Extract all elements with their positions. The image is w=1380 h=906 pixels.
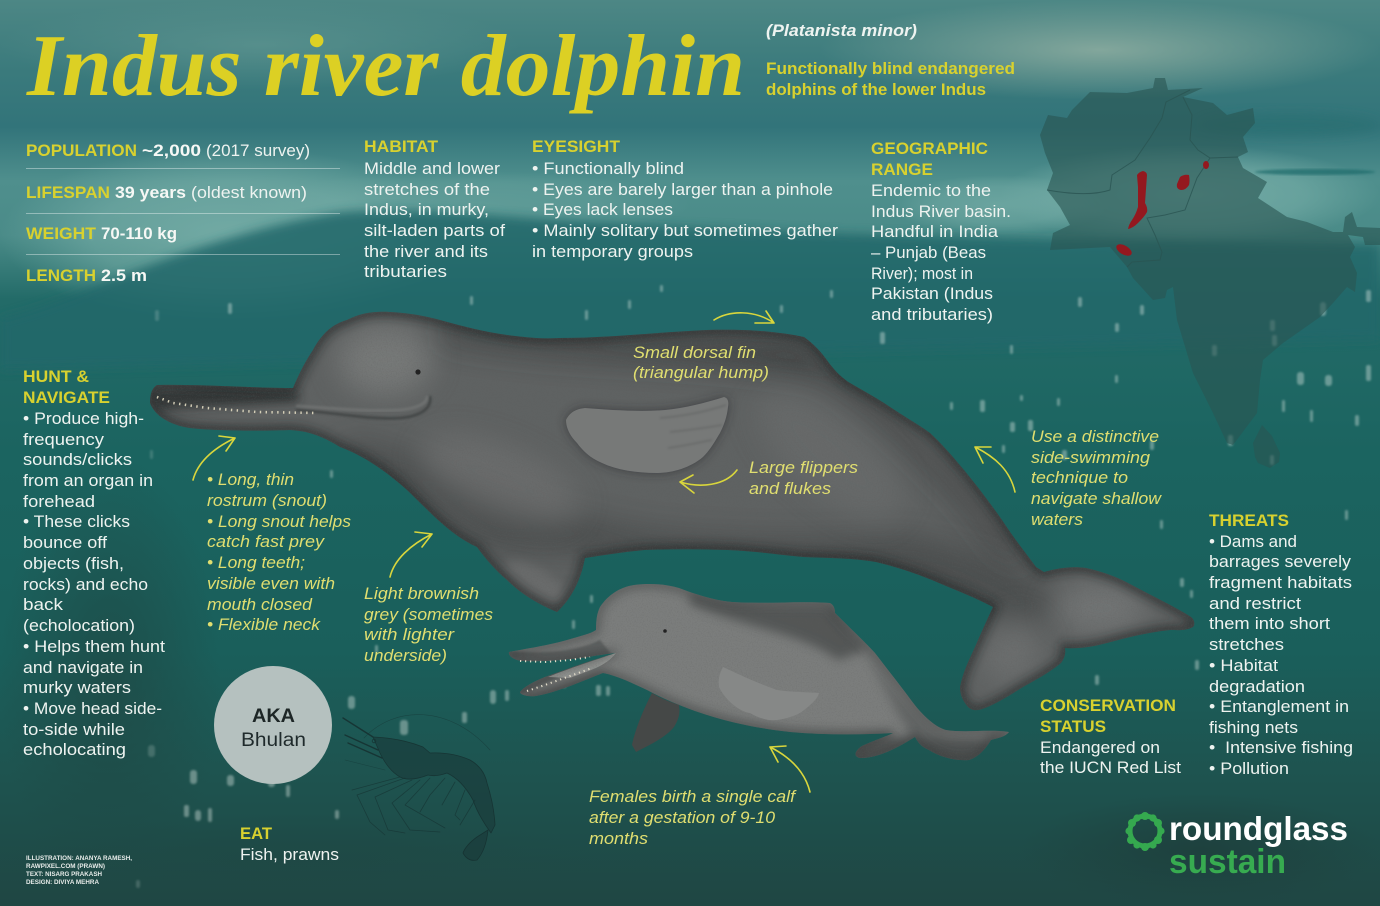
subtitle: tagline: dolphins of the lower Indus: [766, 80, 986, 99]
flipper: [566, 397, 728, 473]
text block: habitat: HABITAT: [364, 137, 439, 156]
callout: large flippers: [680, 458, 859, 498]
text block: eat: EAT: [240, 824, 273, 843]
calf teeth: [520, 657, 592, 691]
text block: geographic range: GEOGRAPHIC: [871, 139, 988, 158]
text block: hunt and navigate: echolocating: [23, 740, 126, 759]
text block: conservation status: Endangered on: [1040, 738, 1160, 757]
text block: threats: THREATS: [1209, 511, 1289, 530]
callout: side-swimming: Use a distinctive: [1031, 427, 1159, 446]
text block: eyesight: • Functionally blind: [532, 159, 684, 178]
credits: ILLUSTRATION: ANANYA RAMESH,: [26, 855, 132, 862]
text block: hunt and navigate: back: [23, 595, 64, 614]
text block: geographic range: RANGE: [871, 160, 933, 179]
arrow: dorsal fin: [714, 311, 774, 323]
stat: population: POPULATION: [26, 141, 137, 160]
text block: geographic range: River); most in: [871, 264, 973, 283]
text block: habitat: Indus, in murky,: [364, 200, 489, 219]
text block: geographic range: Handful in India: [871, 222, 999, 241]
text block: hunt and navigate: HUNT &: [23, 367, 89, 386]
text block: conservation status: the IUCN Red List: [1040, 758, 1181, 777]
mouth line: [296, 396, 430, 418]
logo: roundglass sustain: sustain: [1169, 843, 1286, 881]
callout: side-swimming: waters: [1031, 510, 1084, 529]
text block: threats: degradation: [1209, 677, 1305, 696]
callout: rostrum: • Long, thin: [207, 470, 294, 489]
map: range, Indus: [1128, 171, 1147, 229]
text block: geographic range: [871, 139, 1011, 324]
text block: hunt and navigate: murky waters: [23, 678, 131, 697]
arrow: side-swimming: [975, 447, 1015, 492]
text block: hunt and navigate: to-side while: [23, 720, 125, 739]
stat: lifespan: 39 years: [115, 183, 186, 202]
callout: colour: with lighter: [364, 625, 455, 644]
shading: highlights: [337, 324, 433, 396]
arrow: calf: [770, 746, 810, 792]
text block: eyesight: • Eyes lack lenses: [532, 200, 673, 219]
text block: threats: • Habitat: [1209, 656, 1278, 675]
callout: rostrum: visible even with: [207, 574, 335, 593]
logo: roundglass sustain: [1125, 810, 1348, 881]
callout: small dorsal fin: [633, 311, 774, 382]
text block: threats: stretches: [1209, 635, 1284, 654]
map: range, Punjab: [1177, 175, 1190, 190]
callout: calf: [589, 746, 810, 848]
text block: habitat: tributaries: [364, 262, 447, 281]
text block: threats: them into short: [1209, 614, 1330, 633]
callout: colour: grey (sometimes: [364, 605, 494, 624]
text block: threats: • Intensive fishing: [1209, 738, 1353, 757]
shading: dark rim: [150, 312, 1194, 710]
callout: side-swimming: [975, 427, 1163, 529]
stat: population: (2017 survey): [206, 141, 310, 160]
stat: lifespan: (oldest known): [191, 183, 307, 202]
badge: AKA Bhulan: AKA: [252, 706, 295, 727]
illustration: prawn: [343, 715, 495, 860]
teeth: [157, 397, 317, 413]
text block: conservation status: STATUS: [1040, 717, 1106, 736]
callout: small dorsal fin: (triangular hump): [633, 363, 769, 382]
text block: threats: • Pollution: [1209, 759, 1289, 778]
callout: large flippers: Large flippers: [749, 458, 859, 477]
shading: dark back: [440, 322, 1030, 570]
text block: hunt and navigate: • Move head side-: [23, 699, 162, 718]
text block: hunt and navigate: bounce off: [23, 533, 107, 552]
callout: calf: months: [589, 829, 649, 848]
text block: eat: Fish, prawns: [240, 845, 339, 864]
map: Sri Lanka: [1253, 425, 1280, 468]
callout: rostrum: • Long teeth;: [207, 553, 305, 572]
stat: length: [26, 266, 147, 285]
text block: hunt and navigate: • These clicks: [23, 512, 130, 531]
callout: small dorsal fin: Small dorsal fin: [633, 343, 756, 362]
subtitle: scientific name: (Platanista minor): [766, 21, 917, 40]
text block: habitat: Middle and lower: [364, 159, 500, 178]
callout: side-swimming: technique to: [1031, 468, 1128, 487]
text block: threats: fishing nets: [1209, 718, 1298, 737]
text block: hunt and navigate: frequency: [23, 430, 105, 449]
badge: AKA Bhulan: [214, 666, 332, 784]
arrow: colour: [390, 532, 432, 577]
text block: eyesight: in temporary groups: [532, 242, 693, 261]
callout: side-swimming: side-swimming: [1031, 448, 1151, 467]
badge: AKA Bhulan: Bhulan: [241, 730, 306, 751]
text block: hunt and navigate: and navigate in: [23, 658, 143, 677]
stat: weight: [26, 224, 177, 243]
arrow: flippers: [680, 470, 737, 493]
text block: eyesight: • Eyes are barely larger than a pinhole: [532, 180, 833, 199]
text block: hunt and navigate: • Produce high-: [23, 409, 144, 428]
map: landmass: [1040, 78, 1380, 445]
callout: rostrum: [193, 436, 352, 634]
eye: [415, 369, 421, 375]
map: Indian subcontinent with dolphin range: [1040, 78, 1380, 468]
text block: hunt and navigate: forehead: [23, 492, 95, 511]
stat: weight: WEIGHT: [26, 224, 97, 243]
stat: lifespan: [26, 183, 307, 202]
illustration: adult dolphin: [140, 300, 1210, 720]
calf lower fin: [632, 693, 679, 752]
subtitle: tagline: [766, 59, 1015, 99]
text block: eyesight: [532, 137, 838, 261]
text block: hunt and navigate: sounds/clicks: [23, 450, 132, 469]
illustration: calf dolphin: [508, 584, 1009, 760]
callout: rostrum: • Flexible neck: [207, 615, 322, 634]
text block: threats: fragment habitats: [1209, 573, 1352, 592]
stat: length: 2.5 m: [101, 266, 147, 285]
callout: colour: [364, 532, 494, 665]
text block: hunt and navigate: NAVIGATE: [23, 388, 110, 407]
shading: belly: [356, 440, 1051, 628]
text block: habitat: [364, 137, 505, 281]
text block: conservation status: [1040, 696, 1181, 777]
stats panel: [26, 141, 340, 285]
callout: calf: Females birth a single calf: [589, 787, 797, 806]
text block: eat: [240, 824, 339, 864]
stat: lifespan: LIFESPAN: [26, 183, 110, 202]
arrow: rostrum: [193, 436, 235, 480]
stat: population: ~2,000: [142, 141, 201, 160]
subtitle: tagline: Functionally blind endangered: [766, 59, 1015, 78]
stat: population: [26, 141, 310, 160]
text block: habitat: silt-laden parts of: [364, 221, 505, 240]
text block: hunt and navigate: • Helps them hunt: [23, 637, 165, 656]
text block: threats: • Dams and: [1209, 532, 1297, 551]
text block: habitat: the river and its: [364, 242, 488, 261]
credits: DESIGN: DIVIYA MEHRA: [26, 879, 99, 886]
map: range, lower Indus: [1114, 242, 1134, 258]
credits: RAWPIXEL.COM (PRAWN): [26, 863, 105, 870]
text block: habitat: stretches of the: [364, 180, 490, 199]
text block: geographic range: Pakistan (Indus: [871, 284, 993, 303]
text block: eyesight: EYESIGHT: [532, 137, 621, 156]
flipper shadow: [566, 397, 728, 473]
text block: geographic range: and tributaries): [871, 305, 993, 324]
text block: eyesight: • Mainly solitary but sometimes gather: [532, 221, 838, 240]
callout: rostrum: rostrum (snout): [207, 491, 327, 510]
calf eye: [663, 629, 667, 633]
logo: roundglass sustain: roundglass: [1169, 810, 1348, 847]
callout: colour: underside): [364, 646, 447, 665]
text block: hunt and navigate: (echolocation): [23, 616, 135, 635]
flipper digits: [660, 405, 726, 448]
text block: hunt and navigate: from an organ in: [23, 471, 153, 490]
text block: threats: [1209, 511, 1353, 778]
calf flipper: [719, 667, 819, 720]
text block: hunt and navigate: [23, 367, 165, 759]
text block: threats: barrages severely: [1209, 552, 1352, 571]
text block: geographic range: Endemic to the: [871, 181, 991, 200]
credits: [26, 855, 132, 886]
callout: colour: Light brownish: [364, 584, 479, 603]
callout: calf: after a gestation of 9-10: [589, 808, 776, 827]
text block: hunt and navigate: objects (fish,: [23, 554, 124, 573]
text block: threats: and restrict: [1209, 594, 1301, 613]
callout: rostrum: mouth closed: [207, 595, 313, 614]
callout: large flippers: and flukes: [749, 479, 832, 498]
map: borders: [1047, 90, 1238, 267]
text block: geographic range: Indus River basin.: [871, 202, 1011, 221]
stat: length: LENGTH: [26, 266, 96, 285]
callout: side-swimming: navigate shallow: [1031, 489, 1163, 508]
text block: conservation status: CONSERVATION: [1040, 696, 1176, 715]
text block: hunt and navigate: rocks) and echo: [23, 575, 148, 594]
callout: rostrum: • Long snout helps: [207, 512, 352, 531]
credits: TEXT: NISARG PRAKASH: [26, 871, 102, 878]
title: Indus river dolphin: [26, 18, 745, 115]
text block: geographic range: – Punjab (Beas: [871, 243, 986, 262]
logo: ring: [1125, 812, 1165, 851]
text block: threats: • Entanglement in: [1209, 697, 1349, 716]
map: range, Beas: [1203, 161, 1209, 169]
stat: weight: 70-110 kg: [101, 224, 177, 243]
callout: rostrum: catch fast prey: [207, 532, 326, 551]
